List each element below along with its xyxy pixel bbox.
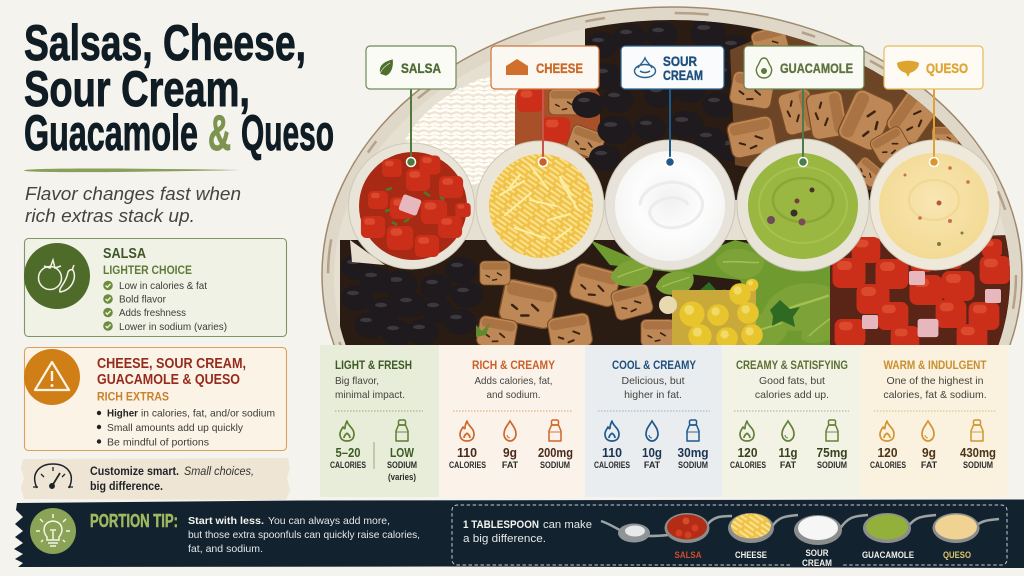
stats: 75mg: [816, 446, 848, 460]
callout: sour cream: [621, 46, 724, 166]
title: Queso: [241, 105, 334, 161]
small bowl: sour cream: [605, 140, 735, 270]
callout: sour cream: CREAM: [663, 68, 703, 83]
rice patch under salsa: [350, 240, 385, 265]
stat: sodium: LOW: [390, 446, 414, 460]
tablespoon note: 1 TABLESPOON: [463, 519, 539, 531]
corn: [659, 279, 763, 349]
icon: shaker: [971, 420, 983, 441]
icon: dollop: [634, 58, 656, 78]
checklist: Low in calories & fat: [119, 280, 207, 292]
checklist: [103, 280, 227, 333]
spoon labels: [674, 548, 971, 569]
black beans bottom left: [341, 254, 483, 346]
panel: cool and creamy: [585, 345, 722, 497]
subtitle: Flavor changes fast when: [25, 184, 241, 204]
stats: 110: [602, 446, 622, 460]
callout: queso: [884, 46, 983, 166]
panel: customize smart: Small choices,: [184, 466, 254, 478]
icon: warning: [24, 349, 80, 405]
panel: light and fresh: Big flavor,: [335, 375, 379, 387]
small bowl: queso: [870, 140, 1000, 270]
small bowl: guacamole: [737, 139, 869, 271]
panel: salsa lighter choice: [24, 238, 286, 336]
spoon handles: [601, 515, 999, 536]
icon: drop: [646, 421, 658, 441]
stats: [730, 446, 848, 470]
panel: customize smart: Customize smart.: [90, 466, 179, 478]
stats: CALORIES: [594, 460, 630, 470]
icon: cheese wedge: [506, 59, 528, 75]
food arrangement: [340, 19, 1020, 352]
spoon labels: CREAM: [802, 558, 832, 569]
stats: 11g: [778, 446, 798, 460]
pico tomatoes: [830, 235, 1010, 352]
title: Guacamole: [24, 105, 198, 161]
rice: [406, 78, 518, 184]
stats: [870, 446, 996, 470]
spoon: queso: [932, 513, 980, 543]
panel: warm and indulgent: WARM & INDULGENT: [884, 360, 986, 372]
bullet list: Higher: [107, 408, 138, 420]
title: &: [208, 105, 231, 161]
title: Sour Cream,: [24, 61, 250, 117]
grilled chicken top right: [726, 25, 965, 190]
stat: calories: [330, 446, 366, 470]
callout: salsa: SALSA: [401, 61, 441, 76]
panel: rich extras: RICH EXTRAS: [97, 390, 169, 404]
spoon labels: CHEESE: [735, 550, 767, 561]
callout: guacamole: [744, 46, 864, 166]
callout: salsa: [366, 46, 456, 166]
panel: creamy and satisfying: [722, 345, 861, 497]
icon: flame: [340, 421, 354, 441]
stat: calories: 5–20: [336, 446, 361, 460]
stats: SODIUM: [817, 460, 847, 470]
panel: light and fresh: minimal impact.: [335, 389, 405, 401]
icon: avocado: [756, 58, 772, 78]
grilled chicken bottom: [476, 261, 675, 352]
panel: rich and creamy: RICH & CREAMY: [472, 360, 555, 372]
dark food base: [340, 20, 1020, 345]
icon: drop: [922, 421, 934, 441]
icon: queso bowl: [897, 61, 919, 77]
spoon: sour cream: [794, 515, 842, 545]
tablespoon note: [463, 519, 592, 545]
panel: cool and creamy: higher in fat.: [624, 389, 682, 401]
stat: calories: CALORIES: [330, 460, 366, 470]
panel: salsa lighter choice: SALSA: [103, 246, 146, 262]
spoon: cheese: [728, 513, 774, 543]
stats: SODIUM: [678, 460, 708, 470]
panel: rich and creamy: [439, 345, 585, 497]
icon: flame: [740, 421, 754, 441]
stats: SODIUM: [540, 460, 570, 470]
portion tip text: but those extra spoonfuls can quickly raise calories,: [188, 529, 420, 541]
stats: 110: [457, 446, 477, 460]
icon: shaker: [826, 420, 838, 441]
stats: [449, 446, 573, 470]
panel: warm and indulgent: calories, fat & sodium.: [883, 389, 987, 401]
panel: warm and indulgent: [861, 345, 1008, 497]
stats: [594, 446, 708, 470]
stats: SODIUM: [963, 460, 993, 470]
stats: 120: [738, 446, 758, 460]
small bowl: cheese: [476, 141, 604, 269]
stats: 120: [878, 446, 898, 460]
stats: CALORIES: [870, 460, 906, 470]
panel: creamy and satisfying: calories add up.: [755, 389, 829, 401]
panel: rich extras: [24, 348, 286, 450]
panel: rich extras: GUACAMOLE & QUESO: [97, 372, 240, 388]
panel: customize smart: big difference.: [90, 481, 163, 493]
tablespoon comparison box: [452, 505, 1007, 569]
checklist: Bold flavor: [119, 294, 166, 306]
stats: 30mg: [678, 446, 708, 460]
black beans top: [572, 19, 751, 171]
stat: sodium: (varies): [388, 472, 416, 482]
subtitle: [25, 184, 241, 226]
tablespoon note: a big difference.: [463, 533, 546, 545]
stats: 430mg: [960, 446, 996, 460]
spoon labels: GUACAMOLE: [862, 550, 914, 561]
panel: creamy and satisfying: CREAMY & SATISFYING: [736, 360, 848, 372]
icon: gauge: [33, 464, 73, 488]
stats: FAT: [644, 460, 661, 470]
tablespoon note: can make: [543, 519, 592, 531]
icon: shaker: [687, 420, 699, 441]
panel: cool and creamy: Delicious, but: [621, 375, 685, 387]
spoon: empty: [618, 524, 650, 542]
title: [24, 15, 334, 161]
panel: creamy and satisfying: Good fats, but: [759, 375, 825, 387]
lettuce: [592, 240, 830, 345]
panel: cool and creamy: COOL & CREAMY: [612, 360, 696, 372]
bullet list: [97, 408, 275, 448]
callout: sour cream: SOUR: [663, 54, 697, 69]
stat: sodium: [387, 446, 417, 482]
icon: flame: [605, 421, 619, 441]
portion tip heading: PORTION TIP:: [90, 511, 178, 531]
spoon: guacamole: [863, 513, 911, 543]
bullet list: Be mindful of portions: [107, 436, 209, 448]
callout: queso: QUESO: [926, 61, 968, 76]
stats: FAT: [780, 460, 797, 470]
checklist: Lower in sodium (varies): [119, 321, 227, 333]
panel: light and fresh: LIGHT & FRESH: [335, 360, 412, 372]
stats: FAT: [502, 460, 519, 470]
spoon: salsa: [664, 513, 710, 543]
stats: 9g: [503, 446, 517, 460]
panel: rich and creamy: Adds calories, fat,: [474, 375, 552, 387]
spoon labels: SALSA: [674, 550, 702, 561]
stats: CALORIES: [449, 460, 486, 470]
panel: rich and creamy: and sodium.: [486, 389, 540, 401]
divider brush: [24, 169, 240, 172]
panel: salsa lighter choice: LIGHTER CHOICE: [103, 263, 192, 277]
tomato and chicken near cheese: [515, 88, 607, 161]
stats: 9g: [922, 446, 936, 460]
stats: 10g: [642, 446, 662, 460]
icon: flame: [880, 421, 894, 441]
stats: CALORIES: [730, 460, 766, 470]
title: Salsas, Cheese,: [24, 15, 306, 71]
portion tip text: [188, 515, 420, 555]
portion tip band: [14, 500, 1024, 569]
panel: customize smart: [21, 458, 290, 500]
icon: drop: [504, 421, 516, 441]
panel: warm and indulgent: One of the highest in: [887, 375, 984, 387]
icon: drop: [782, 421, 794, 441]
bowl with food: [321, 6, 1023, 345]
panel: light and fresh: [320, 345, 439, 497]
bullet list: in calories, fat, and/or sodium: [141, 408, 275, 420]
icon: leaf: [380, 59, 393, 76]
icon: shaker: [549, 420, 561, 441]
portion tip text: Start with less.: [188, 515, 264, 527]
subtitle: rich extras stack up.: [25, 206, 195, 226]
bowl rim stains: [326, 12, 1018, 345]
icon: flame: [460, 421, 474, 441]
stat: sodium: SODIUM: [387, 460, 417, 470]
spoon labels: QUESO: [943, 550, 971, 561]
checklist: Adds freshness: [119, 307, 186, 319]
bullet list: Small amounts add up quickly: [107, 422, 244, 434]
panel: rich extras: CHEESE, SOUR CREAM,: [97, 356, 246, 372]
bowl rim: [321, 6, 1023, 345]
portion tip text: fat, and sodium.: [188, 543, 263, 555]
callout: guacamole: GUACAMOLE: [780, 61, 853, 76]
callout: cheese: CHEESE: [536, 61, 583, 76]
callout: cheese: [491, 46, 599, 166]
icon: tomato and pepper: [24, 243, 90, 309]
stats: 200mg: [538, 446, 573, 460]
stats: FAT: [921, 460, 938, 470]
spoon labels: SOUR: [806, 548, 829, 559]
icon: shaker: [396, 420, 408, 441]
portion tip text: You can always add more,: [268, 515, 390, 527]
small bowl: salsa: [348, 143, 474, 269]
icon: light bulb: [30, 508, 76, 554]
